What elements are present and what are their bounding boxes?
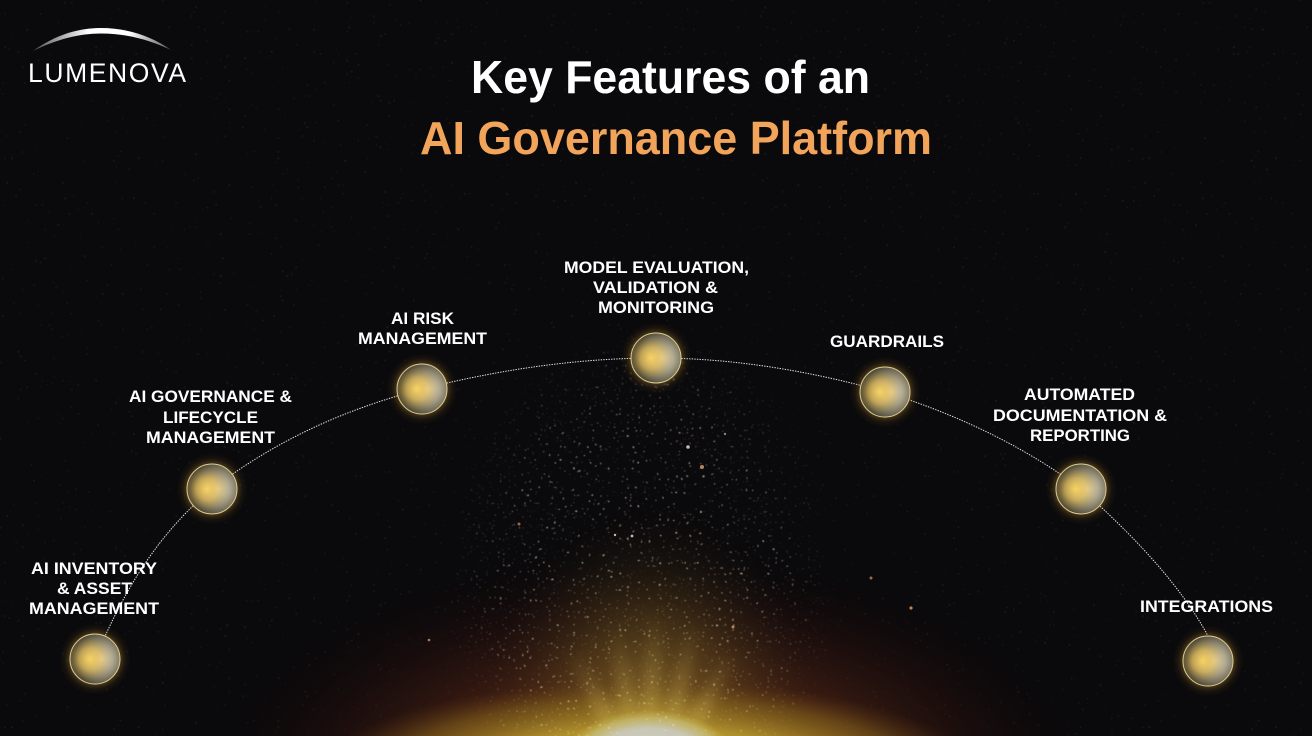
logo wordmark: LUMENOVA xyxy=(28,58,186,88)
label: Model Evaluation, Validation & Monitoring: MODEL EVALUATION, xyxy=(564,259,749,277)
label: Model Evaluation, Validation & Monitoring: MONITORING xyxy=(598,299,714,317)
node: Model Evaluation, Validation & Monitoring xyxy=(620,322,692,394)
title line 2: AI Governance Platform xyxy=(420,112,932,164)
label: Automated Documentation & Reporting: DOCUMENTATION & xyxy=(993,407,1167,425)
label: AI Inventory & Asset Management xyxy=(29,560,159,618)
node: Guardrails xyxy=(849,356,921,428)
node: Integrations xyxy=(1172,625,1244,697)
label: AI Governance & Lifecycle Management xyxy=(129,388,292,447)
label: Model Evaluation, Validation & Monitoring: VALIDATION & xyxy=(593,279,718,297)
title line 1: Key Features of an xyxy=(471,51,870,103)
label: AI Governance & Lifecycle Management: AI GOVERNANCE & xyxy=(129,388,292,406)
label: AI Inventory & Asset Management: MANAGEMENT xyxy=(29,600,159,618)
logo crescent xyxy=(33,28,171,51)
label: Guardrails: GUARDRAILS xyxy=(830,333,944,351)
node: Automated Documentation & Reporting xyxy=(1045,453,1117,525)
label: AI Risk Management: MANAGEMENT xyxy=(358,330,487,348)
label: AI Governance & Lifecycle Management: LIFECYCLE xyxy=(163,409,258,427)
label: Automated Documentation & Reporting: REPORTING xyxy=(1030,427,1130,445)
label: AI Inventory & Asset Management: & ASSET xyxy=(57,580,132,598)
label: AI Risk Management xyxy=(358,310,487,348)
label: AI Governance & Lifecycle Management: MANAGEMENT xyxy=(146,429,275,447)
label: AI Inventory & Asset Management: AI INVENTORY xyxy=(31,560,157,578)
node: AI Governance & Lifecycle Management xyxy=(176,453,248,525)
node: AI Risk Management xyxy=(386,353,458,425)
label: Integrations: INTEGRATIONS xyxy=(1140,598,1273,616)
logo: Lumenova xyxy=(28,28,186,88)
title xyxy=(420,51,932,164)
dotted arc connecting the features xyxy=(95,358,1208,659)
label: Automated Documentation & Reporting xyxy=(993,386,1167,445)
label: AI Risk Management: AI RISK xyxy=(391,310,454,328)
sunrise glow xyxy=(210,510,1090,736)
star cluster xyxy=(452,338,826,736)
bright stars xyxy=(428,433,913,641)
label: Automated Documentation & Reporting: AUTOMATED xyxy=(1024,386,1135,404)
node: AI Inventory & Asset Management xyxy=(59,623,131,695)
label: Model Evaluation, Validation & Monitoring xyxy=(564,259,749,317)
